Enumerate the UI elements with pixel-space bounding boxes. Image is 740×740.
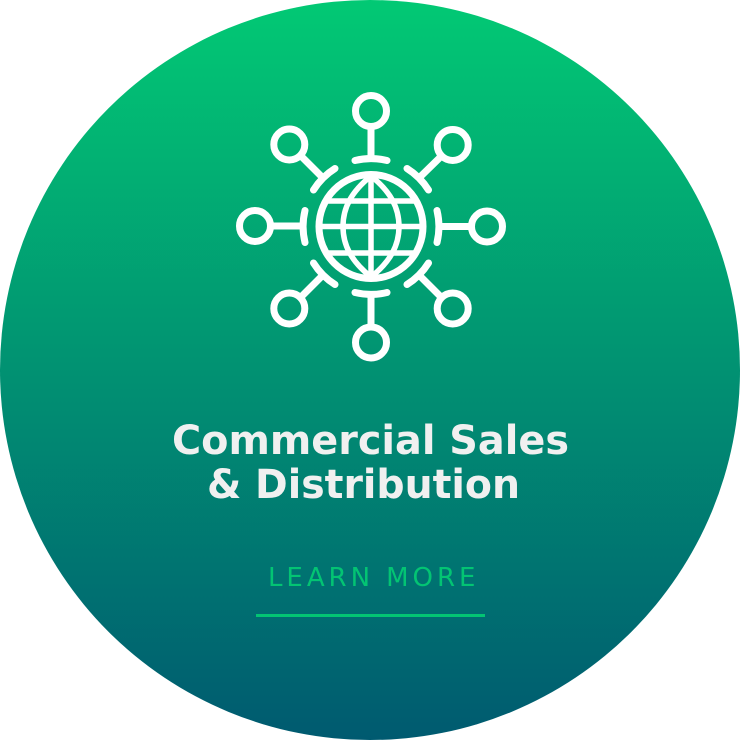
icon: network nodes (240, 96, 502, 358)
learn more link: LEARN MORE (268, 563, 479, 593)
title (172, 418, 569, 508)
title: & Distribution (207, 462, 520, 508)
underline (256, 614, 485, 617)
title: Commercial Sales (172, 418, 569, 464)
icon: globe network (240, 96, 502, 358)
icon: globe (319, 174, 423, 278)
